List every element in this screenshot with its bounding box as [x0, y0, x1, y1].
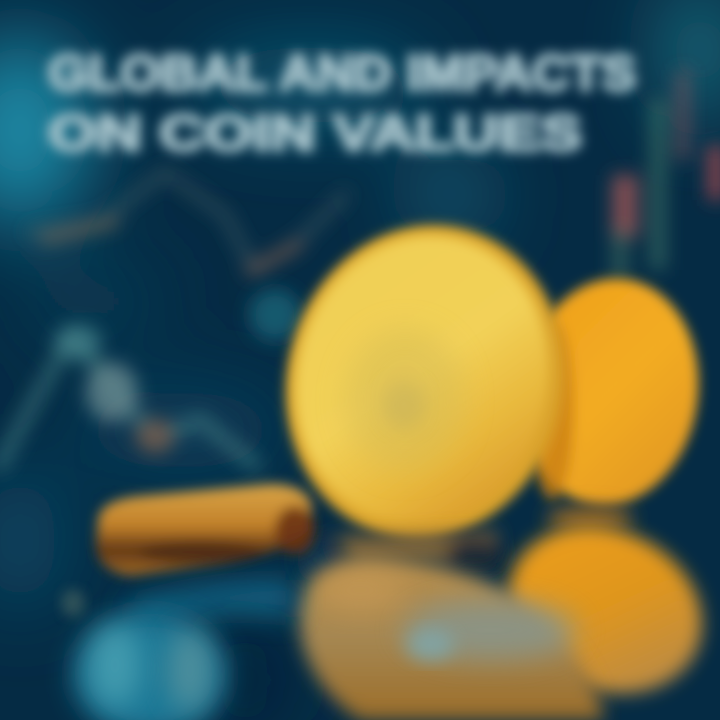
- coin shadow between coins and reflection: [297, 506, 634, 582]
- title: [48, 45, 636, 161]
- icon: back gold coin: [507, 267, 713, 517]
- reflection: gold coins on the surface: [298, 496, 720, 720]
- icon: front gold coin: [253, 195, 597, 569]
- chart: candlesticks on the right: [612, 70, 720, 280]
- title: ON COIN VALUES: [48, 105, 582, 161]
- icon: flat gold coin: [96, 484, 315, 576]
- title: GLOBAL AND IMPACTS: [48, 45, 636, 101]
- reflection: blue globe: [61, 580, 295, 720]
- chart line: lower left wave: [0, 289, 301, 465]
- chart line: background market trend: [30, 172, 345, 272]
